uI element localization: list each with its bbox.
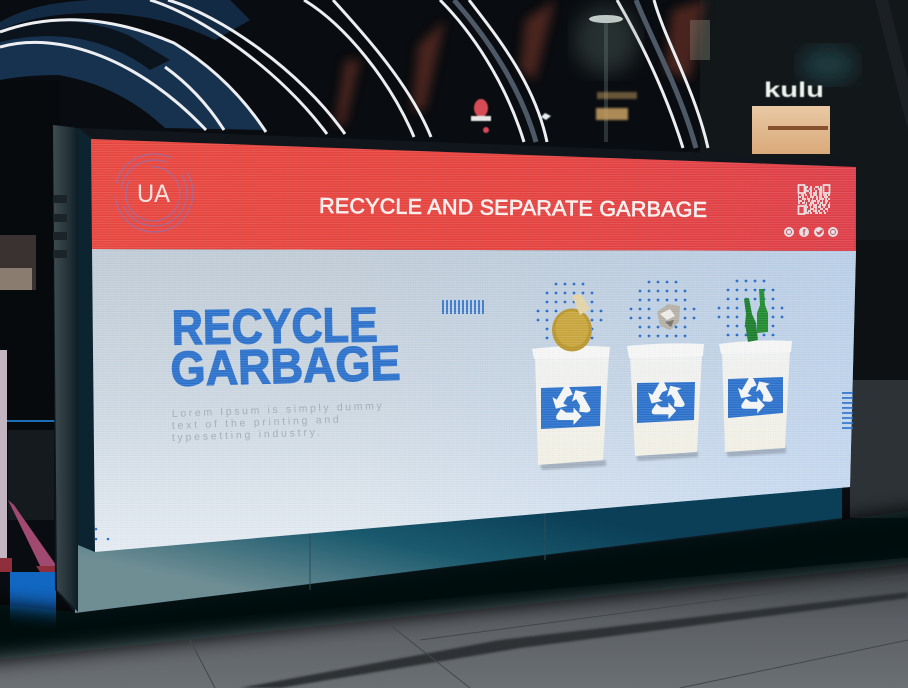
shop sign and window [690, 20, 856, 154]
UA circular logo: UA [137, 180, 170, 208]
bin 2 with crumpled paper [627, 281, 704, 461]
gold lid item [552, 294, 592, 352]
LED screen [91, 139, 856, 552]
main heading: RECYCLE [171, 298, 378, 355]
body text [172, 400, 383, 444]
social icons [784, 227, 838, 238]
red header band [91, 139, 856, 251]
green bottles [744, 289, 768, 342]
body text: Lorem Ipsum is simply dummy [172, 400, 383, 420]
pavement [0, 505, 908, 688]
header title: RECYCLE AND SEPARATE GARBAGE [319, 194, 707, 222]
corner dots [95, 528, 109, 540]
bin 1 with lid and gold can lid [532, 283, 610, 470]
blue arch bands [0, 18, 266, 130]
main heading: GARBAGE [170, 337, 401, 397]
neon sign [596, 92, 637, 120]
blue tint on right of screen [92, 249, 856, 552]
body text: text of the printing and [172, 414, 339, 432]
small red and white lights [471, 99, 551, 133]
body text: typesetting industry. [172, 426, 320, 444]
screen light panel [92, 249, 856, 552]
right side pillar [875, 0, 908, 130]
LED pixel texture [91, 139, 856, 552]
billboard housing [53, 125, 857, 613]
UA circular logo [115, 154, 193, 232]
decorative tick marks [443, 300, 853, 428]
crumpled paper item [657, 304, 680, 330]
bin 3 with green bottles [718, 280, 792, 457]
left street items [0, 235, 56, 628]
main heading [170, 298, 401, 397]
social icons: f [802, 228, 806, 238]
shop sign and window: kulu [764, 79, 824, 102]
QR code [798, 185, 830, 214]
street lamp [574, 6, 638, 142]
white light arcs [0, 0, 708, 148]
